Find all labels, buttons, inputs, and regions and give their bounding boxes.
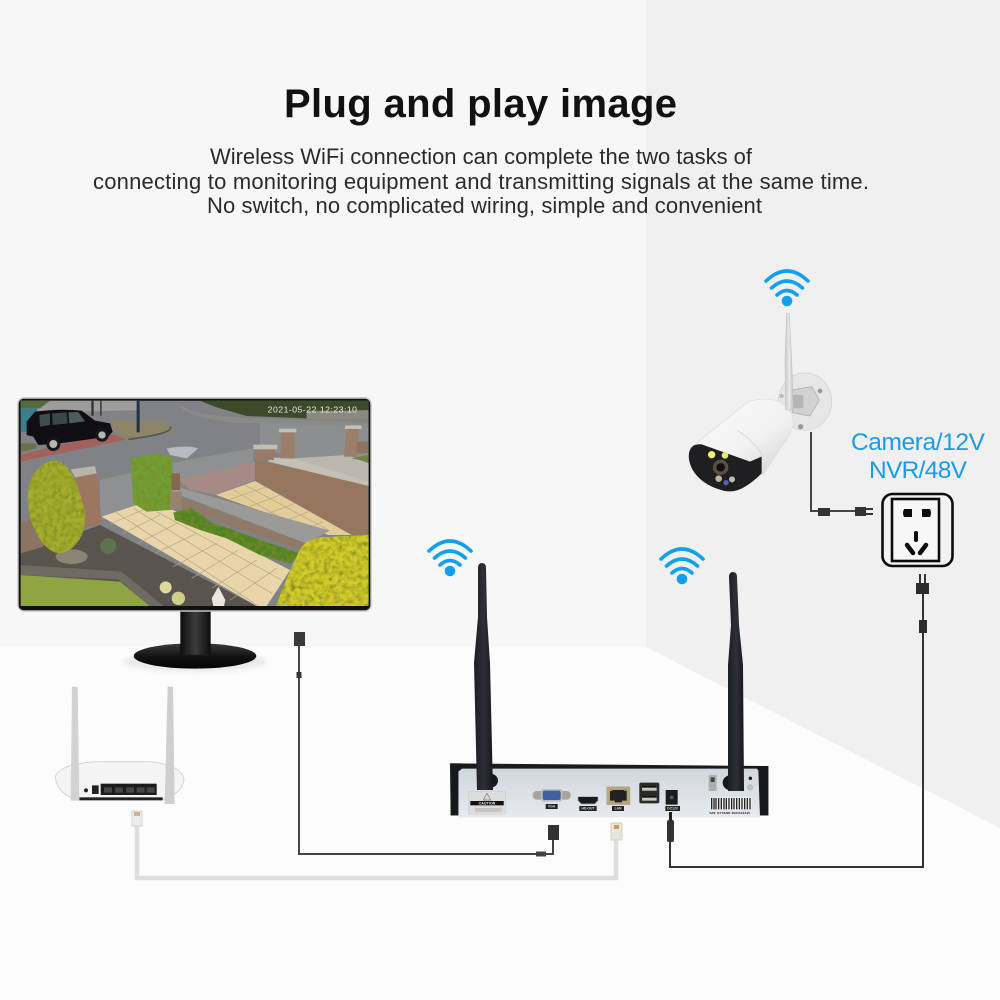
title: Plug and play image <box>284 82 677 126</box>
camera antenna <box>785 313 793 410</box>
soil bed <box>21 525 257 606</box>
car <box>21 408 113 451</box>
DC power port <box>665 790 680 811</box>
right tile path <box>216 481 352 535</box>
pillars <box>256 449 275 460</box>
LAN port: LAN <box>615 807 622 811</box>
timestamp: 2021-05-22 12:23:10 <box>268 405 357 415</box>
subtitle text block: connecting to monitoring equipment and transmitting signals at the same time. <box>93 169 869 194</box>
wifi icon: monitor side <box>429 541 471 576</box>
wifi icon: recorder side <box>661 549 703 584</box>
camera view on the screen <box>21 401 369 606</box>
voltage label: Camera/12V <box>851 429 986 456</box>
left brick wall <box>21 517 43 553</box>
antenna mounts <box>485 774 498 787</box>
HDMI port <box>578 797 598 811</box>
labels and barcode: S/N: KY01NK 2021113445 <box>709 811 750 815</box>
lower right bush <box>276 535 369 606</box>
camera mount <box>778 373 832 430</box>
USB ports <box>639 783 659 803</box>
subtitle text block: No switch, no complicated wiring, simple and convenient <box>207 193 762 218</box>
recorder body <box>450 763 768 817</box>
recorder antenna left <box>474 563 493 790</box>
LAN port <box>607 787 630 811</box>
signposts <box>137 401 140 432</box>
square hedge <box>131 453 173 512</box>
HDMI port: HD-OUT <box>582 807 594 811</box>
right brick wall <box>255 460 369 535</box>
VGA port <box>533 789 571 809</box>
camera face <box>689 444 762 491</box>
camera body <box>690 399 793 475</box>
monitor <box>18 398 371 672</box>
main tile path <box>102 505 290 606</box>
DC power port: DC12V <box>667 807 679 811</box>
cable: power from recorder to outlet <box>667 574 929 867</box>
VGA port: VGA <box>548 805 556 809</box>
router <box>55 687 184 804</box>
caution sticker <box>469 792 505 814</box>
wifi icon: camera <box>766 271 808 306</box>
power outlet icon <box>882 494 952 566</box>
flowers and ornament <box>160 581 172 593</box>
subtitle text block <box>93 144 869 218</box>
caution sticker: CAUTION <box>479 801 496 805</box>
red pavement <box>21 435 127 462</box>
voltage label: NVR/48V <box>869 457 968 484</box>
subtitle text block: Wireless WiFi connection can complete the two tasks of <box>210 144 753 169</box>
cable: camera to outlet <box>811 432 873 516</box>
labels and barcode <box>709 775 753 815</box>
road reflections <box>167 447 198 458</box>
left hedge <box>28 461 85 553</box>
cable: video from monitor to recorder <box>294 632 559 856</box>
traffic island <box>112 420 172 439</box>
lawn <box>21 575 150 606</box>
camera <box>689 313 832 491</box>
voltage label <box>851 429 986 484</box>
shrubs along wall <box>173 508 300 563</box>
centre wall with cap <box>170 487 330 543</box>
monitor stand <box>123 610 267 672</box>
recorder antenna right <box>728 572 744 791</box>
cable: network from router to recorder <box>132 811 622 878</box>
monitor bezel <box>18 398 371 611</box>
